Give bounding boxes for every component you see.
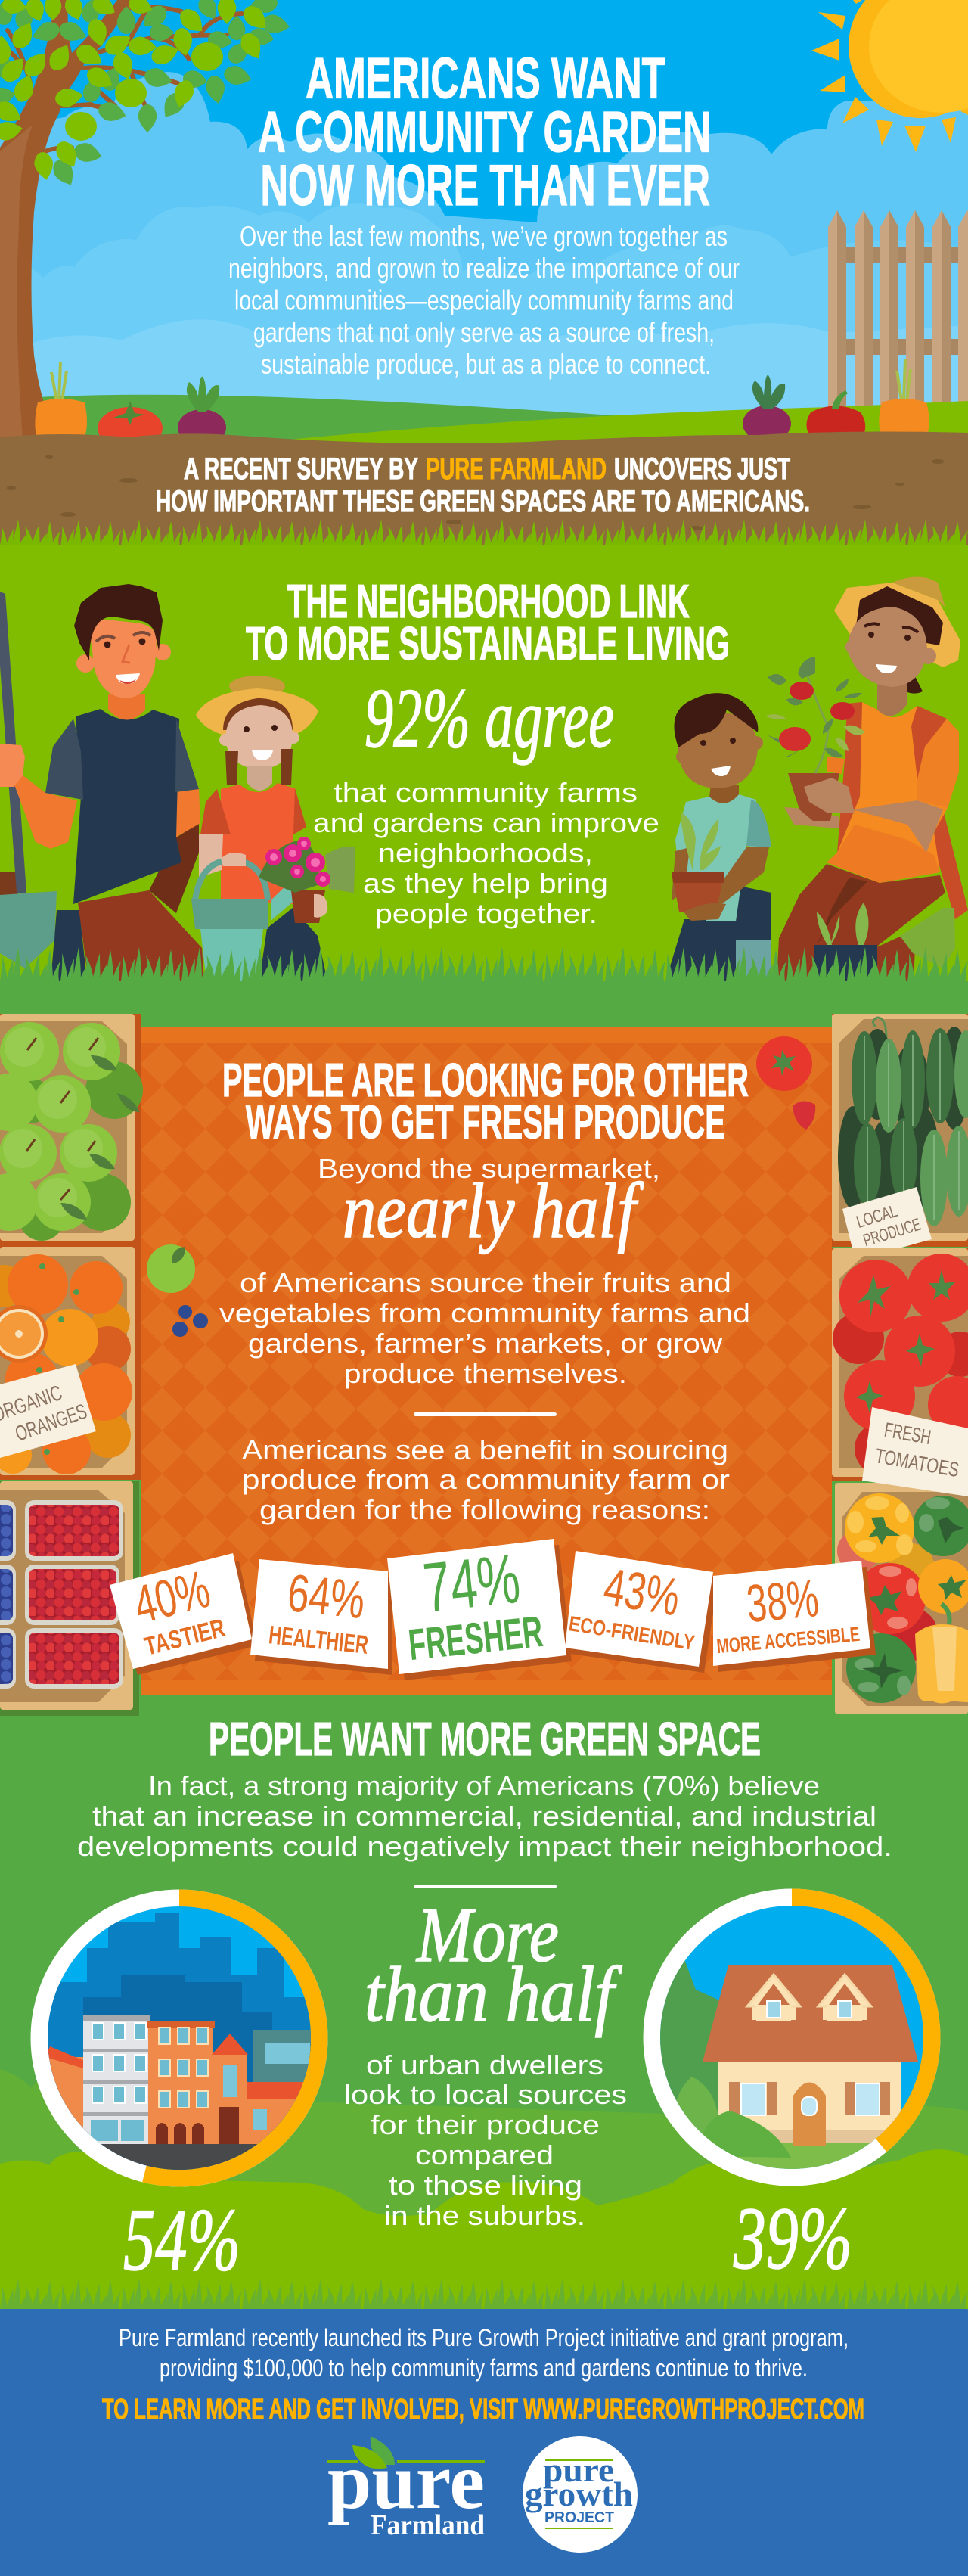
title: AMERICANS WANT: [306, 47, 666, 110]
card: 38% more accessible: 38%: [744, 1568, 821, 1633]
text block: americans source: of Americans source their fruits and: [240, 1267, 731, 1298]
panel: soil banner: [0, 432, 968, 546]
card: 40% tastier: [110, 1553, 257, 1675]
title: A COMMUNITY GARDEN: [258, 100, 711, 165]
text block: majority: In fact, a strong majority of Americans (70%) believe: [148, 1770, 820, 1801]
text block: urban dwellers: look to local sources: [344, 2079, 627, 2110]
panel: footer: [0, 2309, 968, 2576]
text block: urban dwellers: in the suburbs.: [384, 2200, 585, 2231]
grass band: [0, 981, 968, 1738]
survey headline: A RECENT SURVEY BY: [184, 452, 418, 486]
card: 74% fresher: FRESHER: [406, 1607, 545, 1670]
heading: fresh produce: WAYS TO GET FRESH PRODUCE: [246, 1097, 725, 1148]
title: [258, 47, 711, 218]
text block: majority: that an increase in commercial, residential, and industrial: [92, 1801, 876, 1832]
label: fresh tomatoes: [862, 1407, 968, 1496]
panel: neighborhood link: [0, 545, 968, 981]
logo: pure growth project: PROJECT: [544, 2509, 614, 2526]
logo: pure growth project: [523, 2436, 638, 2553]
text block: urban dwellers: [344, 2049, 627, 2231]
illustration: house: [658, 1899, 930, 2179]
heading: the neighborhood link: [246, 576, 730, 670]
text block: urban dwellers: of urban dwellers: [366, 2049, 603, 2080]
text block: americans source: gardens, farmer’s markets, or grow: [248, 1328, 723, 1359]
card: 40% tastier: TASTIER: [141, 1614, 228, 1661]
card: 64% healthier: HEALTHIER: [268, 1620, 370, 1660]
text block: americans source: vegetables from community farms and: [219, 1297, 750, 1328]
card: 64% healthier: [250, 1559, 392, 1675]
text block: community farms: [313, 777, 659, 929]
stat: more than half: than half: [365, 1951, 622, 2038]
card: 64% healthier: 64%: [285, 1563, 368, 1630]
intro text block: [228, 221, 740, 380]
text block: benefit: produce from a community farm or: [242, 1464, 730, 1495]
text block: urban dwellers: for their produce: [371, 2109, 600, 2140]
text: beyond the supermarket: Beyond the supermarket,: [318, 1153, 660, 1184]
card: 74% fresher: [387, 1539, 572, 1680]
label: local produce: [842, 1187, 932, 1260]
icon: wooden fence: [828, 210, 968, 435]
stat: 39%: 39%: [733, 2189, 852, 2288]
card: 74% fresher: 74%: [420, 1540, 523, 1627]
logo: pure growth project: growth: [525, 2475, 633, 2513]
icon: loose tomato: [756, 1036, 812, 1091]
logo: pure farmland: pure: [327, 2437, 485, 2525]
title: NOW MORE THAN EVER: [260, 154, 710, 218]
icon: sun: [811, 0, 968, 152]
survey headline: PURE FARMLAND: [426, 452, 607, 486]
crate: green apples: [0, 1014, 143, 1247]
illustration: man with shovel: [0, 584, 204, 981]
text block: community farms: neighborhoods,: [378, 837, 593, 869]
label: organic oranges: ORANGES: [12, 1400, 90, 1446]
survey headline: UNCOVERS JUST: [614, 452, 790, 486]
text block: majority: developments could negatively impact their neighborhood.: [77, 1831, 892, 1862]
panel: sky header: [0, 0, 968, 449]
intro text block: neighbors, and grown to realize the importance of our: [228, 253, 740, 284]
text block: majority: [77, 1770, 892, 1862]
card: 40% tastier: 40%: [128, 1559, 216, 1635]
intro text block: Over the last few months, we’ve grown together as: [240, 221, 728, 252]
donut: suburbs 39%: [652, 1897, 932, 2179]
logo: pure farmland: Farmland: [371, 2509, 485, 2541]
crate: local produce cucumbers: [832, 1014, 968, 1260]
icon: vegetables right: [743, 359, 929, 442]
stat: 54%: 54%: [123, 2190, 240, 2289]
icon: blueberries: [172, 1305, 208, 1337]
illustration: woman with apple plant: [765, 576, 968, 981]
hills and bushes: [0, 2067, 968, 2309]
card: 43% eco-friendly: 43%: [600, 1557, 684, 1627]
icon: apple tree: [0, 0, 291, 440]
stat: nearly half: nearly half: [343, 1167, 644, 1254]
stat: more than half: More: [415, 1891, 559, 1978]
clouds: [0, 72, 968, 446]
card: 38% more accessible: [713, 1561, 876, 1672]
label: fresh tomatoes: FRESH: [883, 1419, 932, 1449]
crate: berries: [0, 1481, 139, 1716]
illustration: city: [48, 1906, 311, 2170]
illustration: girl with watering can: [191, 676, 355, 981]
text block: urban dwellers: compared: [415, 2139, 554, 2170]
text block: benefit: [242, 1434, 730, 1525]
text block: community farms: and gardens can improve: [313, 807, 659, 838]
intro text block: gardens that not only serve as a source of fresh,: [253, 317, 715, 348]
logo: pure growth project: pure: [543, 2450, 614, 2489]
intro text block: sustainable produce, but as a place to connect.: [261, 349, 711, 380]
donut: urban 54%: [39, 1898, 319, 2182]
crate: peppers: [835, 1483, 968, 1714]
text block: benefit: Americans see a benefit in sourcing: [242, 1434, 728, 1465]
text block: community farms: people together.: [375, 898, 597, 929]
illustration: boy with seedling: [666, 693, 771, 981]
hills: [38, 395, 968, 446]
stat: more than half: [365, 1891, 622, 2038]
icon: vegetables left: [35, 362, 226, 449]
footer text: providing $100,000 to help community farms and gardens continue to thrive.: [160, 2354, 808, 2382]
text block: community farms: that community farms: [334, 777, 638, 808]
crate: fresh tomatoes: [832, 1248, 968, 1496]
text block: urban dwellers: to those living: [389, 2170, 582, 2201]
card: 38% more accessible: MORE ACCESSIBLE: [715, 1623, 861, 1658]
icon: strawberry: [793, 1101, 815, 1130]
icon: green apple: [147, 1244, 195, 1293]
card: 43% eco-friendly: [565, 1551, 718, 1673]
survey headline: [156, 452, 810, 518]
text block: benefit: garden for the following reasons:: [259, 1494, 710, 1525]
stat: 92% agree: 92% agree: [365, 672, 614, 766]
heading: fresh produce: [222, 1055, 749, 1148]
label: organic oranges: [0, 1364, 96, 1458]
card: 43% eco-friendly: ECO-FRIENDLY: [567, 1611, 697, 1655]
intro text block: local communities—especially community farms and: [234, 284, 734, 316]
text block: americans source: [219, 1267, 750, 1389]
panel: green space: [0, 1714, 968, 2309]
panel: fresh produce: [0, 1014, 968, 1716]
heading: the neighborhood link: THE NEIGHBORHOOD LINK: [287, 576, 690, 628]
text block: americans source: produce themselves.: [344, 1358, 627, 1389]
footer text: [119, 2324, 849, 2382]
label: local produce: PRODUCE: [861, 1214, 923, 1250]
crate: organic oranges: [0, 1247, 141, 1480]
label: local produce: LOCAL: [854, 1201, 900, 1232]
heading: the neighborhood link: TO MORE SUSTAINABLE LIVING: [246, 618, 730, 670]
text block: community farms: as they help bring: [363, 868, 608, 899]
